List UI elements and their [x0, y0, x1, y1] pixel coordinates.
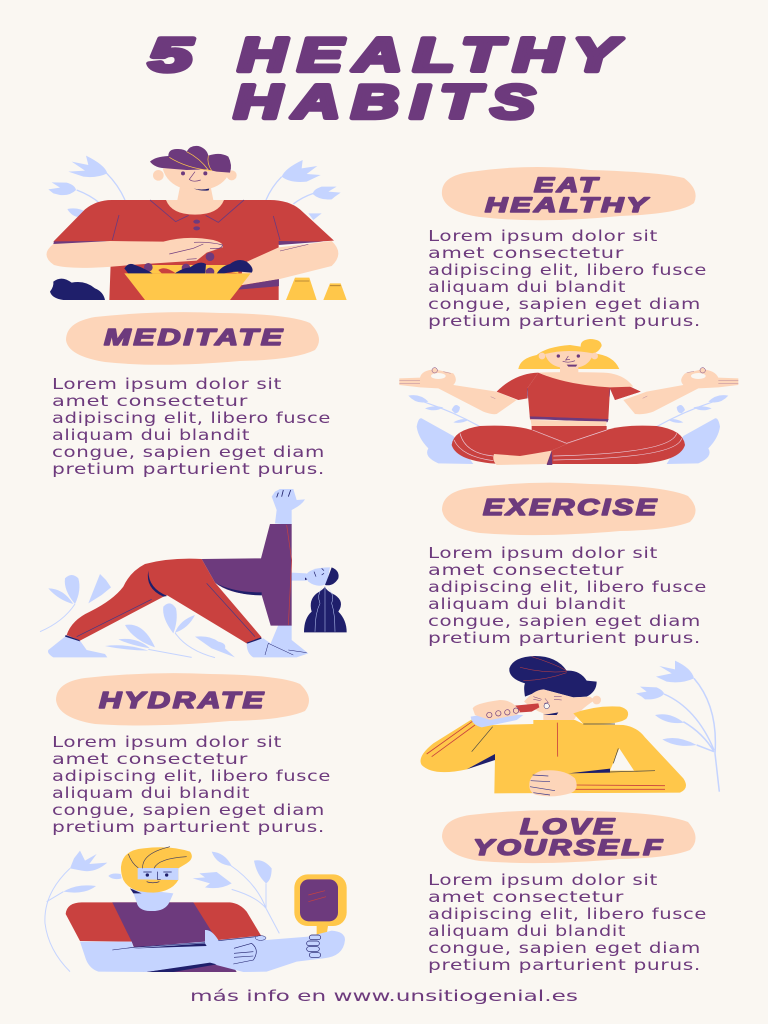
text block: hydrate: pretium parturient purus.: [52, 818, 325, 836]
title: HABITS: [234, 75, 546, 128]
hair: [150, 146, 231, 173]
text block: love yourself: pretium parturient purus.: [428, 956, 701, 974]
trousers: [67, 559, 262, 643]
legs: [532, 426, 607, 444]
bottle: [471, 713, 523, 727]
text block: hydrate: amet consectetur: [52, 750, 248, 768]
label text: HYDRATE: [99, 687, 266, 713]
head: [539, 353, 545, 359]
text block: hydrate: congue, sapien eget diam: [52, 801, 325, 819]
text block: love yourself: [428, 871, 707, 974]
label text: YOURSELF: [473, 835, 665, 860]
neck and collar: [166, 183, 224, 215]
arm: [80, 930, 345, 972]
label text: MEDITATE: [104, 324, 285, 350]
label text: EXERCISE: [483, 494, 659, 520]
text block: hydrate: adipiscing elit, libero fusce: [52, 767, 331, 785]
illustration: person doing triangle pose: [40, 489, 347, 658]
panel: exercise label: [442, 483, 696, 535]
footer: más info en www.unsitiogenial.es: [190, 987, 578, 1005]
leaves: [408, 395, 728, 464]
torso: [497, 373, 538, 400]
text block: eat healthy: [428, 227, 707, 330]
title: HEALTHY: [238, 28, 629, 81]
illustration: man preparing salad: [46, 146, 347, 300]
text block: eat healthy: amet consectetur: [428, 244, 624, 262]
text block: love yourself: congue, sapien eget diam: [428, 939, 701, 957]
text block: eat healthy: pretium parturient purus.: [428, 312, 701, 330]
panel: love yourself label: [442, 810, 696, 863]
hair: [518, 339, 619, 369]
shirt: [66, 902, 262, 950]
label text: EAT: [534, 174, 600, 197]
label background: [442, 810, 696, 863]
text block: meditate: aliquam dui blandit: [52, 426, 250, 444]
text block: exercise: Lorem ipsum dolor sit: [428, 544, 658, 562]
text block: exercise: [428, 544, 707, 647]
head: [108, 873, 122, 879]
label text: LOVE: [520, 814, 617, 839]
text block: love yourself: aliquam dui blandit: [428, 922, 626, 940]
text block: exercise: adipiscing elit, libero fusce: [428, 578, 707, 596]
illustration: woman drinking water: [421, 656, 719, 796]
plant: [636, 661, 719, 792]
mirror: [317, 923, 328, 935]
title: 5: [149, 28, 205, 81]
text block: love yourself: Lorem ipsum dolor sit: [428, 871, 658, 889]
text block: love yourself: amet consectetur: [428, 888, 624, 906]
arms: [399, 369, 517, 414]
text block: eat healthy: congue, sapien eget diam: [428, 295, 701, 313]
feet and hands: [48, 637, 107, 657]
text block: eat healthy: adipiscing elit, libero fusce: [428, 261, 707, 279]
text block: eat healthy: aliquam dui blandit: [428, 278, 626, 296]
label background: [442, 483, 696, 535]
face: [592, 696, 601, 704]
shirt: [53, 200, 334, 300]
text block: meditate: congue, sapien eget diam: [52, 443, 325, 461]
text block: eat healthy: Lorem ipsum dolor sit: [428, 227, 658, 245]
hair bun and ponytail: [304, 586, 347, 632]
text block: hydrate: Lorem ipsum dolor sit: [52, 733, 282, 751]
label text: HEALTHY: [485, 194, 650, 217]
text block: meditate: [52, 375, 331, 478]
cones: [286, 278, 347, 300]
title: [149, 28, 629, 128]
hair: [509, 656, 597, 697]
illustration: woman meditating: [399, 339, 738, 465]
text block: hydrate: [52, 733, 331, 836]
label text: [485, 174, 650, 217]
panel: meditate label: [66, 312, 319, 365]
label background: [66, 312, 319, 365]
text block: hydrate: aliquam dui blandit: [52, 784, 250, 802]
text block: exercise: pretium parturient purus.: [428, 629, 701, 647]
text block: meditate: pretium parturient purus.: [52, 460, 325, 478]
leaves: [48, 156, 341, 220]
neck and head: [292, 573, 307, 581]
label background: [442, 167, 696, 220]
torso: [202, 524, 292, 626]
text block: meditate: amet consectetur: [52, 392, 248, 410]
salad bowl: [145, 265, 238, 273]
text block: meditate: adipiscing elit, libero fusce: [52, 409, 331, 427]
hood: [573, 706, 628, 724]
arms: [240, 241, 338, 285]
neck: [132, 888, 173, 911]
text block: exercise: amet consectetur: [428, 561, 624, 579]
illustration: man with mirror: [45, 847, 347, 972]
panel: eat healthy label: [442, 167, 696, 220]
hand on chest: [529, 770, 577, 796]
text block: exercise: congue, sapien eget diam: [428, 612, 701, 630]
text block: exercise: aliquam dui blandit: [428, 595, 626, 613]
panel: hydrate label: [56, 673, 309, 725]
text block: meditate: Lorem ipsum dolor sit: [52, 375, 282, 393]
head: [153, 170, 164, 181]
label text: [473, 814, 665, 860]
bush: [50, 279, 105, 300]
label background: [56, 673, 309, 725]
sweater: [421, 718, 686, 793]
foot: [493, 451, 552, 465]
hand with bottle: [473, 700, 520, 720]
plants: [45, 851, 279, 972]
text block: love yourself: adipiscing elit, libero fusce: [428, 905, 707, 923]
leaves: [40, 574, 235, 658]
